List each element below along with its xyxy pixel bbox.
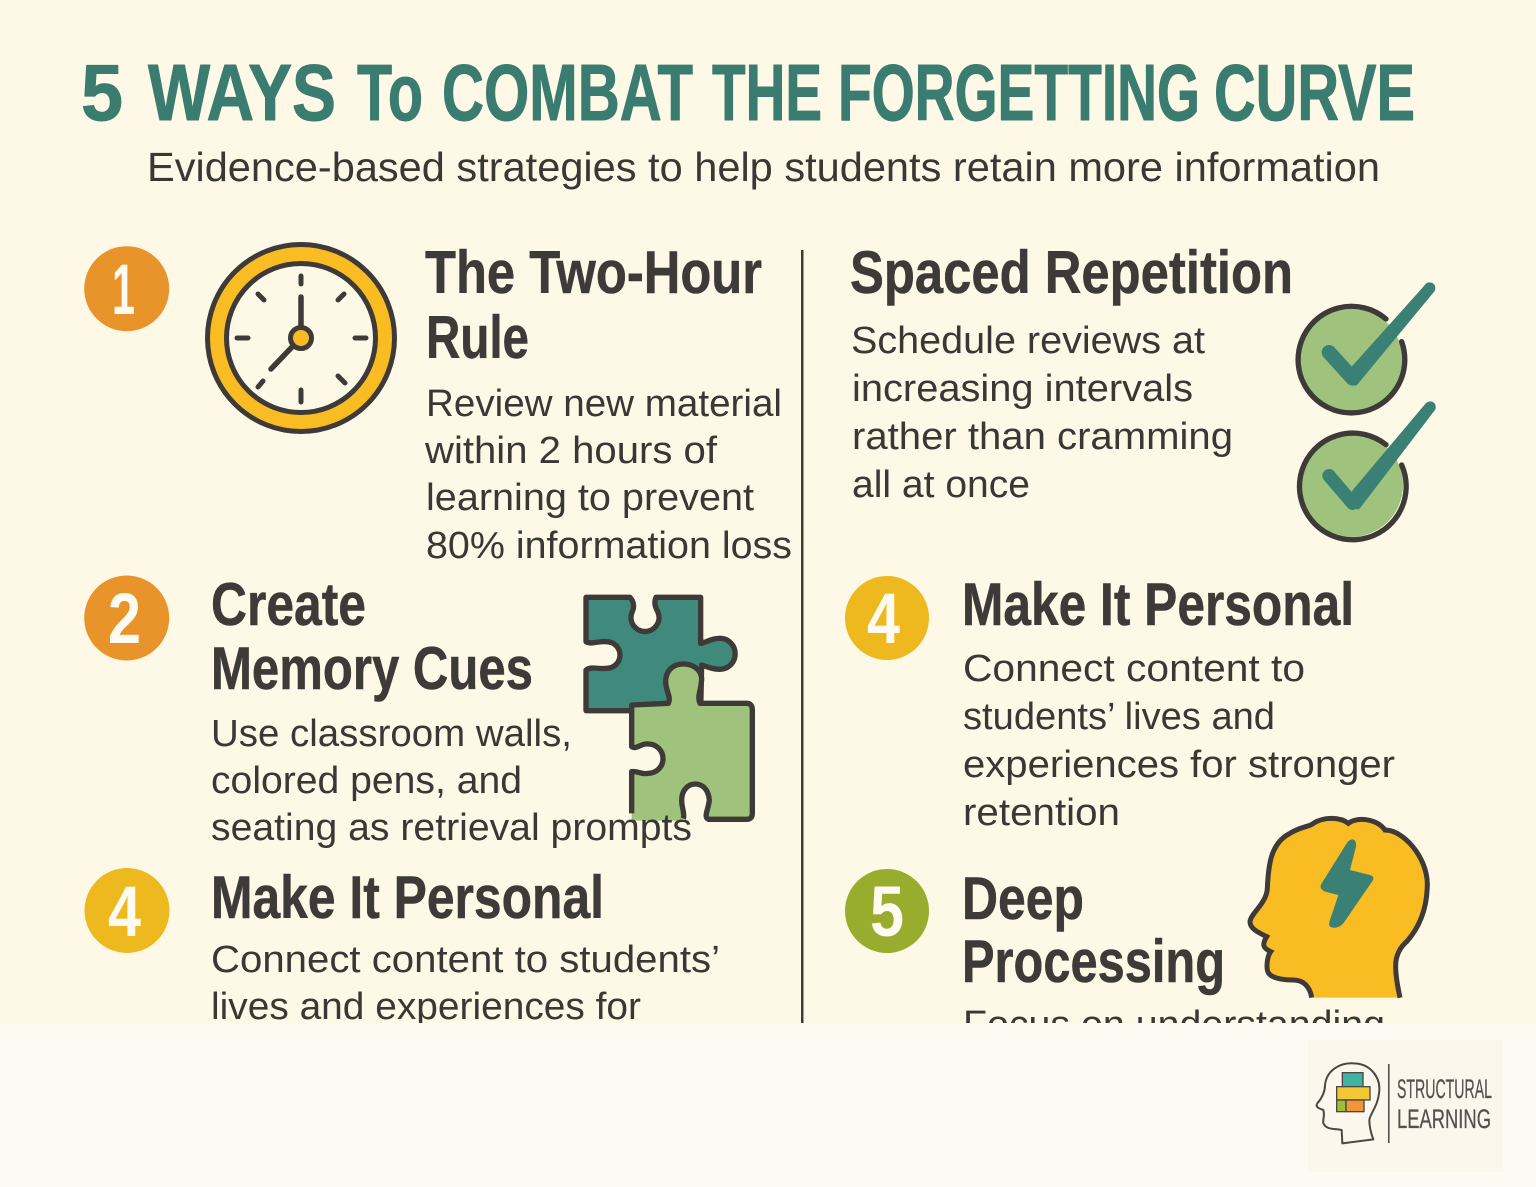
panel: the two-hour rule <box>84 239 792 567</box>
heading: create memory cues: Create <box>211 571 366 638</box>
badge 1 <box>84 246 169 331</box>
heading: the two-hour rule: The Two-Hour <box>425 239 762 306</box>
text: make it personal right body <box>963 648 1395 834</box>
title: COMBAT <box>442 48 693 137</box>
text: memory cues body <box>211 713 692 849</box>
icon: check marks <box>1298 282 1436 540</box>
text: two-hour rule body: 80% information loss <box>426 525 792 567</box>
panel: create memory cues <box>84 571 752 849</box>
text: two-hour rule body: Review new material <box>426 383 782 425</box>
text: two-hour rule body: within 2 hours of <box>424 430 717 472</box>
title: To <box>357 48 423 137</box>
text: memory cues body: seating as retrieval prompts <box>211 807 692 849</box>
heading: spaced repetition: Spaced Repetition <box>850 239 1293 306</box>
badge 2: 2 <box>108 580 141 659</box>
text: two-hour rule body: learning to prevent <box>426 477 754 519</box>
badge 4 right <box>845 576 929 660</box>
text: make it personal right body: experiences for stronger <box>963 744 1395 786</box>
title: WAYS <box>148 48 336 137</box>
badge 4 left <box>84 868 170 953</box>
badge 5: 5 <box>870 873 904 952</box>
heading: create memory cues <box>211 571 533 702</box>
text: make it personal left body <box>211 939 720 1028</box>
badge 2 <box>84 576 169 660</box>
logo: structural learning <box>1308 1040 1503 1172</box>
title: THE <box>712 48 822 137</box>
text: make it personal left body: lives and experiences for <box>211 986 641 1028</box>
subtitle: Evidence-based strategies to help students retain more information <box>147 144 1380 190</box>
text: deep processing body: Focus on understanding <box>963 1004 1385 1046</box>
text: spaced repetition body: rather than cramming <box>852 416 1233 458</box>
badge 4 right: 4 <box>867 580 900 659</box>
icon: head with lightning <box>1250 818 1427 998</box>
logo wordmark <box>1397 1074 1492 1134</box>
text: make it personal right body: students’ lives and <box>963 696 1275 738</box>
heading: deep processing: Deep <box>962 865 1084 932</box>
panel: make it personal right <box>845 571 1395 834</box>
text: spaced repetition body: all at once <box>852 464 1030 506</box>
icon: puzzle pieces <box>586 597 752 821</box>
badge 5 <box>845 869 929 953</box>
text: spaced repetition body <box>851 320 1233 506</box>
text: make it personal right body: Connect content to <box>963 648 1305 690</box>
heading: the two-hour rule <box>425 239 762 371</box>
text: two-hour rule body <box>424 383 792 567</box>
badge 1: 1 <box>112 251 135 330</box>
logo wordmark: LEARNING <box>1397 1104 1491 1134</box>
title: FORGETTING <box>838 48 1200 137</box>
icon: clock <box>208 244 394 432</box>
heading: deep processing: Processing <box>962 928 1225 995</box>
panel: deep processing <box>845 818 1427 1046</box>
text: spaced repetition body: Schedule reviews at <box>851 320 1205 362</box>
title <box>81 48 1415 137</box>
title: CURVE <box>1214 48 1415 137</box>
text: memory cues body: Use classroom walls, <box>211 713 572 755</box>
heading: make it personal left: Make It Personal <box>211 864 604 931</box>
text: make it personal right body: retention <box>963 792 1120 834</box>
footer band <box>0 1023 1536 1187</box>
text: memory cues body: colored pens, and <box>211 760 522 802</box>
text: spaced repetition body: increasing intervals <box>852 368 1193 410</box>
icon: logo head <box>1317 1063 1379 1143</box>
heading: the two-hour rule: Rule <box>426 304 529 371</box>
panel: make it personal left <box>84 864 720 1028</box>
divider <box>801 250 804 1025</box>
title: 5 <box>81 48 123 137</box>
heading: make it personal right: Make It Personal <box>962 571 1354 638</box>
badge 4 left: 4 <box>108 873 141 952</box>
panel: spaced repetition <box>850 239 1436 540</box>
text: make it personal left body: Connect content to students’ <box>211 939 720 981</box>
heading: create memory cues: Memory Cues <box>211 635 533 702</box>
heading: deep processing <box>962 865 1225 995</box>
